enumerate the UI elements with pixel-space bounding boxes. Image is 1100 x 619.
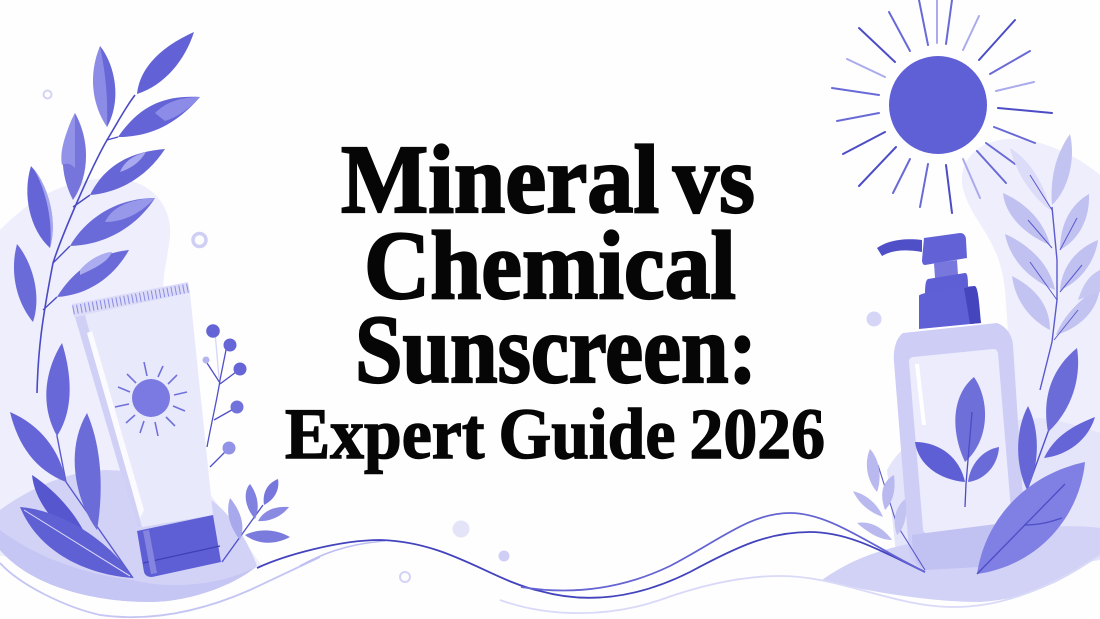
title line 1: Mineral vs <box>341 126 755 234</box>
small leaf cluster near bottle <box>853 449 925 570</box>
title line 2: Chemical <box>364 212 736 320</box>
left main branch <box>14 32 200 393</box>
berry sprig <box>202 324 246 467</box>
tube cap <box>137 515 221 577</box>
sun disc <box>889 56 987 154</box>
title line 3: Sunscreen: <box>355 296 757 404</box>
bottle leaf icon <box>915 377 999 507</box>
tube body <box>75 293 213 528</box>
mineral sunscreen tube <box>72 282 221 577</box>
bottom outline waves <box>0 513 1100 617</box>
decorative bubbles <box>44 90 882 582</box>
left ground mound <box>0 470 257 602</box>
tube crimp <box>72 282 190 317</box>
sun with rays <box>832 0 1052 213</box>
branch stem <box>37 95 135 393</box>
pump head <box>922 233 967 265</box>
left lower leaves <box>10 343 133 578</box>
bottle label <box>909 349 1012 533</box>
bottle body <box>894 323 1023 570</box>
pump bottle <box>877 233 1023 570</box>
title <box>285 126 825 474</box>
bottle cap <box>919 286 981 329</box>
right light branch <box>1003 134 1100 390</box>
right background blob <box>962 139 1100 500</box>
right ground mound <box>822 418 1100 602</box>
pump nozzle <box>877 239 922 256</box>
tube sun icon <box>115 362 187 436</box>
right front leaves <box>977 348 1095 574</box>
small leaf sprig near tube <box>222 479 290 562</box>
sun rays <box>832 0 1052 213</box>
left background blob <box>0 178 262 566</box>
title line 4: Expert Guide 2026 <box>285 394 825 474</box>
